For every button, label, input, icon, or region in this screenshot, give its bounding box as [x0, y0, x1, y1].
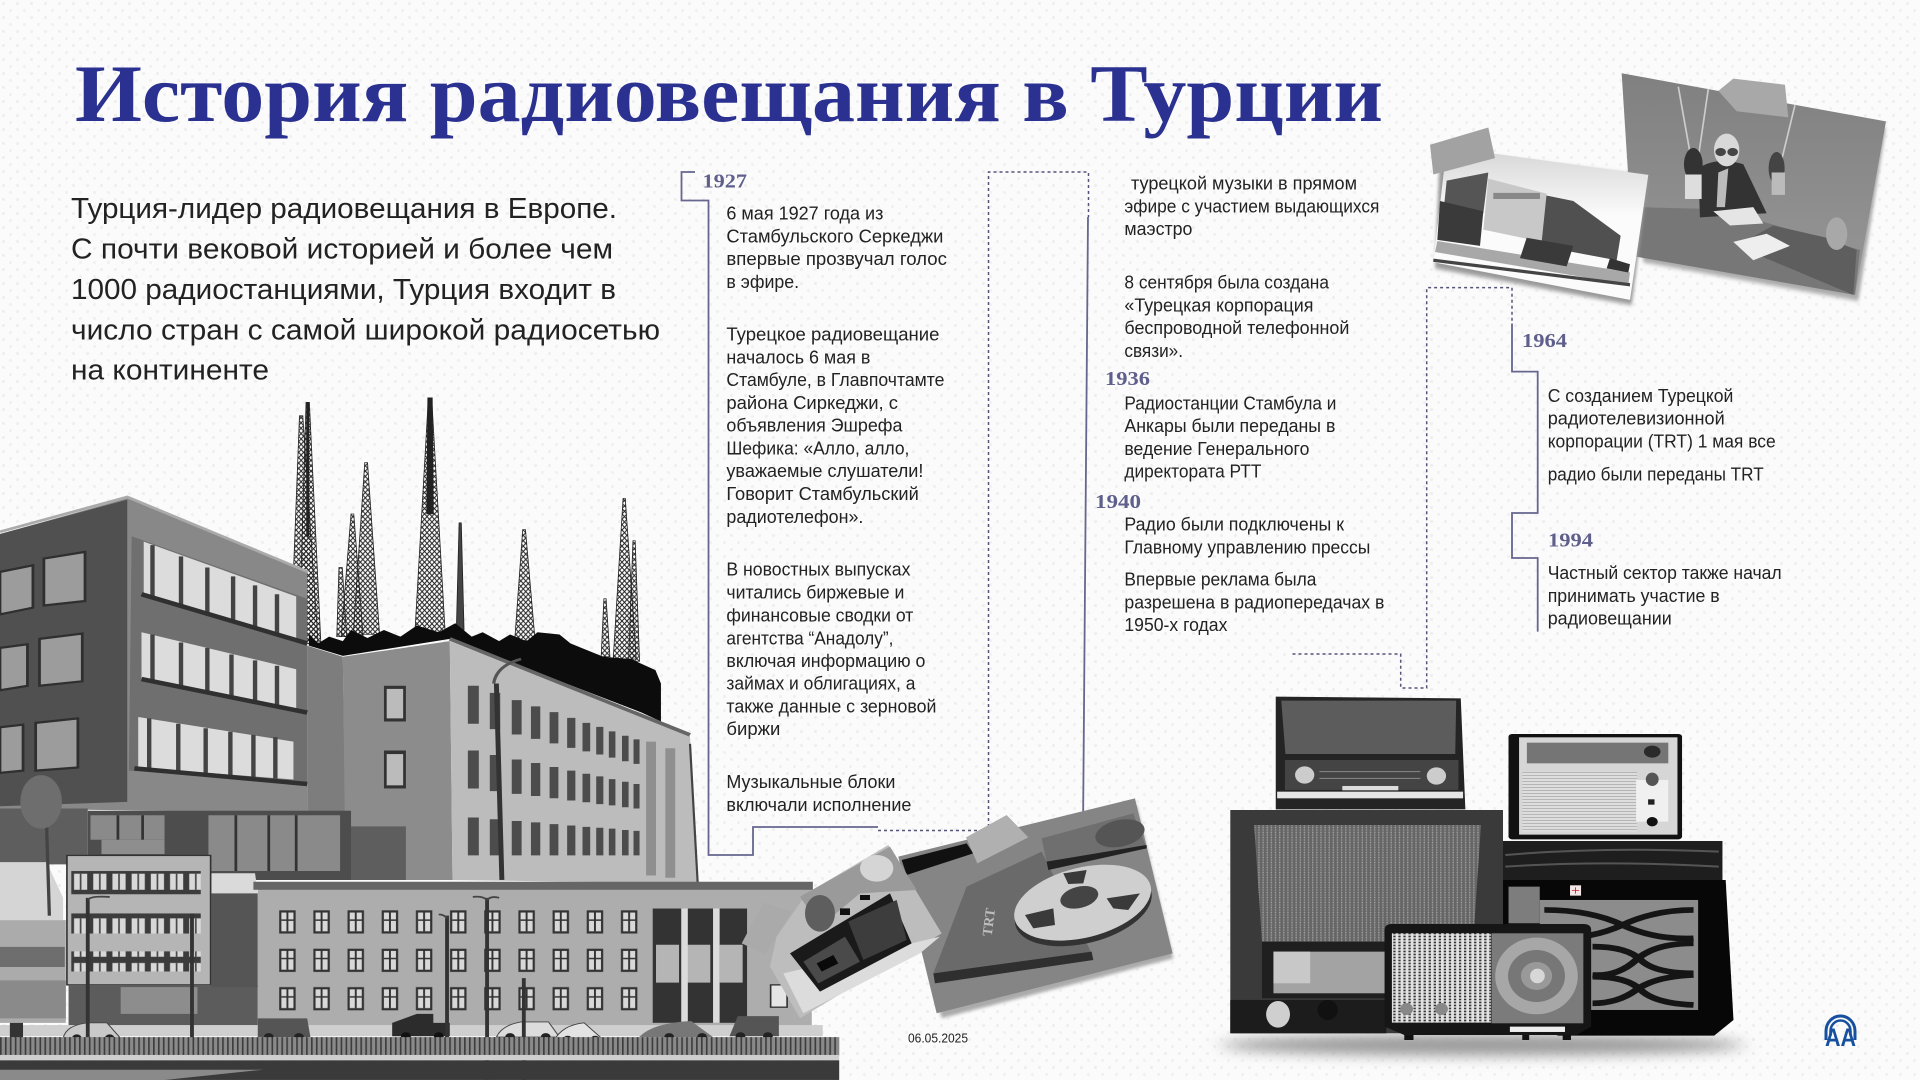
radio towers [291, 398, 640, 661]
tape: cassette photo [742, 903, 792, 954]
text block: 1940: Главному управлению прессы [1124, 536, 1370, 558]
text block: 1936: Радиостанции Стамбула и [1124, 392, 1336, 414]
radio: top right [1509, 734, 1682, 839]
radio: front dial [1385, 924, 1591, 1040]
text block: 1964: С созданием Турецкой [1548, 385, 1733, 406]
text block: 1940: 1950-х годах [1124, 614, 1228, 635]
text block: 1927 first column: радиотелефон». [726, 506, 863, 527]
radio: top left [1276, 697, 1465, 809]
text block: 1927 first column: началось 6 мая в [726, 346, 871, 368]
text block: 1927 first column: также данные с зерновой [726, 696, 936, 716]
text block: 1927 first column: включали исполнение [726, 794, 911, 815]
text block: 1936: директората РТТ [1124, 460, 1261, 482]
small office block [67, 855, 211, 985]
text block: 1936: Анкары были переданы в [1124, 415, 1336, 436]
text block: 1994 [1548, 562, 1782, 629]
text block: 1927 first column: займах и облигациях, а [726, 672, 916, 694]
photo: cassette player [770, 845, 942, 1018]
text block: 1940: разрешена в радиопередачах в [1124, 592, 1385, 612]
photo: tape reel and book: TRT [981, 907, 999, 937]
text block: 1927 first column: финансовые сводки от [726, 604, 914, 626]
text block: 1927 first column: Говорит Стамбульский [726, 483, 919, 504]
intro text block: 1000 радиостанциями, Турция входит в [71, 274, 616, 306]
text block: 1936: ведение Генерального [1124, 438, 1309, 459]
connector wing [307, 646, 346, 826]
text block: 1927 continuation: «Турецкая корпорация [1124, 294, 1313, 316]
left tower block [0, 498, 307, 813]
logo: AA: AA [1825, 1024, 1856, 1052]
text block: 1940: Радио были подключены к [1124, 514, 1345, 534]
text block: 1964: радиотелевизионной [1548, 408, 1725, 429]
tape: right [1718, 79, 1788, 117]
timeline connector 1964 [1292, 288, 1538, 688]
text block: 1927 first column: читались биржевые и [726, 582, 904, 602]
timeline connector 1927 [682, 172, 1088, 855]
text block: 1940 [1124, 514, 1385, 635]
text block: 1927 first column: 6 мая 1927 года из [726, 202, 883, 224]
text block: 1940: Впервые реклама была [1124, 568, 1317, 590]
tape: left [1430, 128, 1495, 175]
street with cars [0, 1025, 823, 1036]
text block: 1927 first column: включая информацию о [726, 650, 925, 671]
mark: red plus [1570, 885, 1581, 896]
text block: 1927 continuation: эфире с участием выдающихся [1124, 196, 1379, 216]
text block: 1927 first column: Музыкальные блоки [726, 771, 895, 792]
text block: 1927 first column: агентства “Анадолу”, [726, 628, 893, 648]
intro text block: число стран с самой широкой радиосетью [71, 314, 660, 346]
intro text block: Турция-лидер радиовещания в Европе. [71, 193, 617, 225]
front building [258, 888, 812, 1027]
text block: 1994: Частный сектор также начал [1548, 562, 1782, 583]
year 1927: 1927 [702, 170, 747, 192]
radio: large wooden [1230, 810, 1503, 1033]
text block: 1927 first column: В новостных выпусках [726, 558, 911, 580]
central wing side [343, 641, 453, 880]
text block: 1927 first column: Турецкое радиовещание [726, 324, 939, 344]
text block: 1927 continuation: связи». [1124, 340, 1183, 361]
radio: black with woven grille [1503, 841, 1733, 1036]
text block: 1936 [1124, 392, 1336, 482]
long facade [450, 641, 697, 884]
intro text block [71, 193, 660, 386]
treeline [309, 623, 661, 721]
text block: 1927 first column: Стамбульского Серкеджи [726, 226, 943, 246]
title: История радиовещания в Турции [75, 48, 1383, 139]
photo: tape reel and book [898, 798, 1173, 1013]
year 1964: 1964 [1522, 330, 1567, 352]
text block: 1927 first column: уважаемые слушатели! [726, 460, 923, 481]
text block: 1927 first column: впервые прозвучал голос [726, 248, 947, 269]
text block: 1964: корпорации (TRT) 1 мая все [1548, 430, 1776, 452]
text block: 1927 continuation [1124, 172, 1379, 361]
building collage photo [0, 398, 839, 1080]
text block: 1994: радиовещании [1548, 608, 1672, 629]
date: 06.05.2025 [908, 1032, 968, 1046]
text block: 1927 continuation: беспроводной телефонной [1124, 317, 1349, 338]
text block: 1927 first column: в эфире. [726, 271, 799, 292]
text block: 1927 first column: объявления Эшрефа [726, 414, 903, 436]
text block: 1927 continuation: 8 сентября была создана [1124, 272, 1330, 292]
photo: cassette player and reel [742, 798, 1173, 1018]
year 1994: 1994 [1548, 530, 1593, 552]
text block: 1964: радио были переданы TRT [1548, 464, 1764, 484]
year 1940: 1940 [1095, 491, 1141, 513]
text block: 1927 continuation: турецкой музыки в прямом [1131, 172, 1357, 194]
text block: 1927 first column [726, 202, 947, 815]
photo: presenter at microphones and building [1430, 73, 1886, 305]
text block: 1964 [1548, 385, 1776, 484]
logo: AA [1825, 1016, 1856, 1052]
text block: 1927 continuation: маэстро [1124, 218, 1192, 239]
intro text block: С почти вековой историей и более чем [71, 234, 613, 266]
tape: reel photo [966, 815, 1028, 863]
photo: radio building [1433, 147, 1648, 300]
photo: presenter [1622, 73, 1886, 295]
text block: 1927 first column: Шефика: «Алло, алло, [726, 438, 909, 458]
text block: 1927 first column: района Сиркеджи, с [726, 392, 898, 413]
radio stack photo [1221, 697, 1744, 1056]
text block: 1994: принимать участие в [1548, 585, 1720, 606]
text block: 1927 first column: Стамбуле, в Главпочтамте [726, 369, 944, 390]
intro text block: на континенте [71, 354, 269, 386]
year 1936: 1936 [1105, 368, 1150, 390]
text block: 1927 first column: биржи [726, 718, 780, 739]
